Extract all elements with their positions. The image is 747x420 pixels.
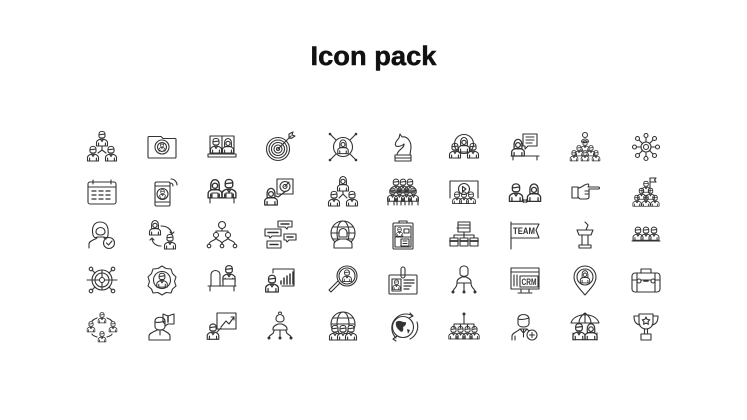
icon: pointing hand [572, 184, 600, 199]
icon: presentation screen with play [450, 181, 478, 204]
icon: person with branching tree [452, 266, 476, 294]
icon: ship wheel [87, 267, 117, 293]
icon: person pointing at target board [265, 179, 293, 205]
icon: gear with person [148, 266, 176, 295]
icon: two people at desk [208, 266, 236, 291]
icon: podium [577, 222, 593, 248]
icon: network hub [632, 134, 660, 160]
icon: woman with branching tree [268, 312, 292, 340]
icon: person with message [149, 314, 174, 340]
icon: briefcase [632, 269, 660, 292]
icon: two people exchanging [509, 184, 541, 202]
icon: box hierarchy [450, 222, 478, 246]
icon: two people at table [208, 179, 236, 203]
icon: umbrella protecting two people [571, 313, 599, 340]
icon: hierarchy with four people [449, 312, 479, 339]
icon: group of three [450, 134, 478, 158]
icon: chess knight [395, 134, 411, 161]
icon: woman with check badge [89, 222, 114, 248]
icon: phone with person [155, 179, 177, 206]
icon: people pyramid with flag [633, 178, 659, 206]
icon: CRM monitor [511, 268, 539, 293]
icon: id badge [389, 267, 417, 294]
icon: speaker with speech bubble [511, 134, 539, 160]
icon: team flag [511, 222, 539, 249]
icon: map pin with person [574, 266, 596, 295]
icon: laptop video call [208, 136, 236, 157]
icon: crowd of people [388, 179, 418, 205]
icon: person with rising chart [207, 313, 236, 339]
icon: target with arrow [266, 132, 295, 160]
icon: people pyramid [570, 132, 600, 161]
icon: team hierarchy [88, 131, 116, 161]
icon: magnifier with person [329, 266, 357, 292]
icon: three people behind a line [632, 227, 660, 241]
icon: trophy [634, 314, 658, 340]
icon: circle of four people [87, 313, 117, 342]
icon: org tree of circles [207, 222, 237, 248]
icon: two people with cycle arrows [150, 220, 176, 249]
icon: clipboard with profile [393, 221, 413, 249]
icon: folder with person [148, 136, 176, 158]
icon: globe with three people [330, 312, 356, 340]
icon: team flag: TEAM [513, 226, 535, 236]
icon: person with four arrows [329, 133, 357, 161]
icon: three-person hierarchy [328, 176, 358, 206]
icon: person with plus [512, 314, 537, 340]
title: Icon pack [310, 41, 437, 71]
icon: globe with person [331, 221, 355, 248]
icon: CRM monitor: CRM [522, 277, 536, 287]
icon: calendar [88, 180, 116, 204]
icon: chat bubbles [265, 221, 296, 248]
icon: earth with cycle arrows [392, 313, 418, 341]
icon: person with bar chart board [266, 269, 294, 292]
